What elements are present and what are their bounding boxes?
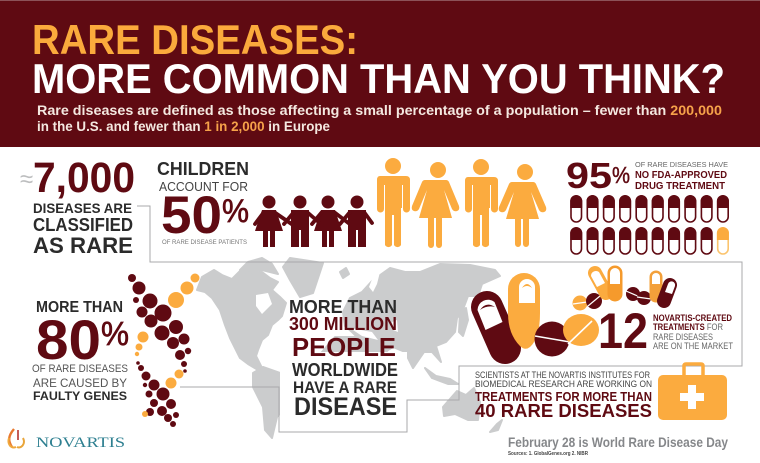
footer: world rare disease day [508, 434, 728, 457]
maroon tablet [534, 322, 570, 356]
stat: 80% faulty genes: FAULTY GENES [33, 389, 127, 403]
stat: children 50%: % [222, 193, 249, 229]
stat: children 50%: 50 [161, 186, 222, 245]
stat: 80% faulty genes: MORE THAN [36, 299, 123, 316]
stat: 300 million people: 300 MILLION [289, 314, 397, 334]
stat: 80% faulty genes [32, 299, 129, 403]
stat: 95%: 95 [566, 155, 612, 196]
stat: 95%: OF RARE DISEASES HAVE [635, 160, 728, 169]
stat: 7,000 diseases [20, 154, 135, 258]
text block: scientists: SCIENTISTS AT THE NOVARTIS INSTITUTES FOR [475, 370, 650, 381]
footer: world rare disease day: Sources: 1. GlobalGenes.org 2. NIBR [508, 451, 588, 457]
stat: 7,000 diseases: ≈ [20, 166, 33, 193]
stat: 300 million people: DISEASE [294, 393, 397, 421]
stat: children 50%: CHILDREN [157, 159, 249, 179]
stat: 12 treatments: NOVARTIS-CREATED [653, 313, 732, 323]
stat: 80% faulty genes: % [101, 315, 129, 352]
small tablets [572, 287, 651, 310]
stat: 12 treatments: TREATMENTS FOR [653, 322, 723, 332]
subtitle: Rare diseases are defined as those affecting a small percentage of a population – fewer than 200,000 [37, 103, 722, 118]
world map [197, 258, 502, 438]
stat: 7,000 diseases: DISEASES ARE [33, 200, 132, 216]
text block: scientists [475, 370, 652, 421]
title: MORE COMMON THAN YOU THINK? [32, 55, 725, 102]
icon: first aid kit [658, 364, 727, 420]
stat: 12 treatments: RARE DISEASES [653, 332, 713, 342]
icon: pill grid [570, 195, 729, 254]
stat: children 50% [157, 159, 249, 246]
stat: children 50%: OF RARE DISEASE PATIENTS [162, 240, 247, 246]
icon: adults [377, 158, 546, 248]
stat: 80% faulty genes: ARE CAUSED BY [33, 376, 127, 390]
large yellow capsule [508, 273, 540, 349]
title [32, 16, 725, 102]
stat: 80% faulty genes: OF RARE DISEASES [32, 363, 128, 375]
stat: 95% [566, 155, 728, 196]
footer: world rare disease day: February 28 is World Rare Disease Day [508, 434, 728, 450]
stat: 80% faulty genes: 80 [36, 308, 101, 371]
stat: 300 million people [289, 297, 398, 421]
text block: scientists: BIOMEDICAL RESEARCH ARE WORKING ON [475, 379, 652, 390]
stat: 95%: % [612, 162, 630, 188]
title: RARE DISEASES: [32, 16, 358, 63]
stat: 12 treatments: 12 [598, 303, 648, 359]
stat: children 50%: ACCOUNT FOR [159, 179, 248, 194]
map water details [256, 272, 398, 340]
small capsules [591, 268, 675, 301]
stat: 300 million people: PEOPLE [292, 332, 396, 362]
icon: children holding hands [255, 196, 372, 247]
stat: 7,000 diseases: AS RARE [33, 233, 133, 258]
subtitle: in the U.S. and fewer than 1 in 2,000 in Europe [37, 119, 330, 134]
stat: 95%: DRUG TREATMENT [635, 181, 725, 192]
logo: Novartis [8, 429, 125, 451]
stat: 12 treatments [598, 303, 733, 359]
stat: 300 million people: MORE THAN [289, 297, 397, 317]
stat: 300 million people: HAVE A RARE [293, 378, 397, 397]
text block: scientists: TREATMENTS FOR MORE THAN [475, 389, 652, 404]
stat: 7,000 diseases: 7,000 [33, 154, 135, 202]
connector lines [137, 206, 742, 432]
subtitle [37, 103, 722, 134]
stat: 300 million people: WORLDWIDE [292, 360, 398, 380]
icon: DNA helix [128, 274, 200, 427]
white backing for centre text [280, 352, 407, 432]
header banner [0, 0, 760, 147]
stat: 12 treatments: ARE ON THE MARKET [653, 341, 733, 351]
text block: scientists: 40 RARE DISEASES [475, 401, 652, 421]
yellow tablet [563, 314, 599, 346]
logo: Novartis: NOVARTIS [36, 435, 125, 451]
stat: 95%: NO FDA-APPROVED [635, 170, 727, 181]
illustration: pills and capsules [478, 268, 675, 356]
stat: 7,000 diseases: CLASSIFIED [33, 215, 133, 235]
large maroon capsule [478, 300, 505, 348]
